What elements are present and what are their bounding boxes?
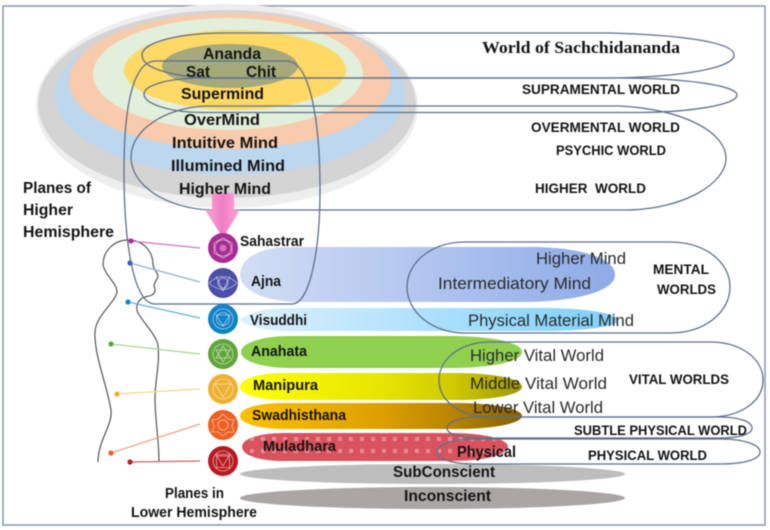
label: Manipura: Manipura	[253, 377, 319, 394]
label: Supermind: Supermind	[181, 86, 264, 103]
contour: Higher World	[131, 106, 726, 210]
chakra: Sahastrar	[208, 233, 238, 263]
label: Sat: Sat	[186, 64, 211, 81]
label: Subtle Physical World: SUBTLE PHYSICAL WORLD	[574, 423, 747, 438]
label: Mental Worlds	[653, 262, 716, 297]
band: Anahata	[241, 336, 522, 368]
band: Swadhisthana	[240, 403, 522, 429]
label: Ajna: Ajna	[251, 273, 282, 290]
label: OverMind: OverMind	[184, 112, 260, 129]
chakra: Manipura	[208, 374, 238, 404]
chakra: Ajna	[208, 268, 238, 298]
heading: Planes in Lower Hemisphere: Lower Hemisphere	[131, 504, 257, 521]
heading: Planes of Higher Hemisphere: Hemisphere	[23, 224, 114, 241]
concentric planes of consciousness	[36, 4, 418, 208]
label: Visuddhi: Visuddhi	[250, 312, 307, 329]
label: Physical: Physical	[457, 444, 516, 461]
label: Higher Vital World: Higher Vital World	[470, 347, 604, 365]
connector lines and dots	[108, 238, 200, 465]
chakra: Swadhisthana	[208, 410, 238, 440]
label: Chit: Chit	[246, 64, 277, 81]
contour: Vital Worlds	[439, 342, 763, 417]
band: Muladhara	[242, 433, 508, 461]
contour: Mental Worlds	[407, 242, 730, 333]
label: Vital Worlds: VITAL WORLDS	[629, 372, 729, 387]
label: Sahastrar: Sahastrar	[240, 233, 304, 250]
contour: Supramental World	[144, 78, 737, 112]
band: Inconscient	[240, 487, 625, 509]
band: Manipura	[240, 373, 522, 400]
label: Physical World: PHYSICAL WORLD	[588, 448, 707, 463]
heading: Planes of Higher Hemisphere: Higher	[23, 202, 73, 219]
chakra: Anahata	[208, 339, 238, 369]
contour: World of Sachchidananda	[142, 33, 734, 78]
label: Middle Vital World: Middle Vital World	[470, 375, 607, 393]
body silhouette	[95, 240, 159, 462]
label: Intuitive Mind: Intuitive Mind	[172, 135, 278, 152]
label: Mental Worlds: WORLDS	[657, 282, 716, 297]
band: Visuddhi	[240, 308, 618, 331]
label: Anahata: Anahata	[251, 343, 308, 360]
heading: Planes of Higher Hemisphere: Planes of	[23, 180, 92, 197]
contour: Physical World	[437, 439, 760, 464]
contour: central column	[124, 61, 320, 304]
chakra: Visuddhi	[208, 304, 238, 334]
label: Illumined Mind: Illumined Mind	[171, 158, 285, 175]
label: Physical Material Mind: Physical Material Mind	[468, 312, 634, 330]
label: World of Sachchidananda: World of Sachchidananda	[482, 38, 680, 57]
band: Ajna	[240, 247, 615, 302]
label: Lower Vital World: Lower Vital World	[473, 399, 603, 417]
chakra: Muladhara	[208, 446, 238, 476]
heading: Planes in Lower Hemisphere	[131, 485, 257, 521]
label: Psychic World: PSYCHIC WORLD	[556, 143, 666, 158]
label: Higher Mind (mental): Higher Mind	[536, 250, 626, 268]
label: Inconscient: Inconscient	[404, 488, 492, 505]
label: SubConscient: SubConscient	[393, 464, 496, 481]
arrow: pink descent	[205, 193, 240, 238]
label: Higher Mind: Higher Mind	[179, 181, 271, 198]
label: Higher World: HIGHER WORLD	[535, 181, 646, 196]
label: Intermediatory Mind: Intermediatory Mind	[438, 275, 591, 293]
label: Swadhisthana: Swadhisthana	[252, 407, 347, 424]
label: Overmental World: OVERMENTAL WORLD	[531, 120, 680, 135]
contour: Subtle Physical World	[447, 417, 752, 438]
label: Muladhara: Muladhara	[263, 438, 337, 455]
band: SubConscient	[240, 464, 625, 484]
label: Ananda: Ananda	[203, 46, 261, 63]
heading: Planes of Higher Hemisphere	[23, 180, 114, 241]
heading: Planes in Lower Hemisphere: Planes in	[165, 485, 224, 502]
label: Mental Worlds: MENTAL	[653, 262, 709, 277]
label: Supramental World: SUPRAMENTAL WORLD	[522, 82, 680, 97]
